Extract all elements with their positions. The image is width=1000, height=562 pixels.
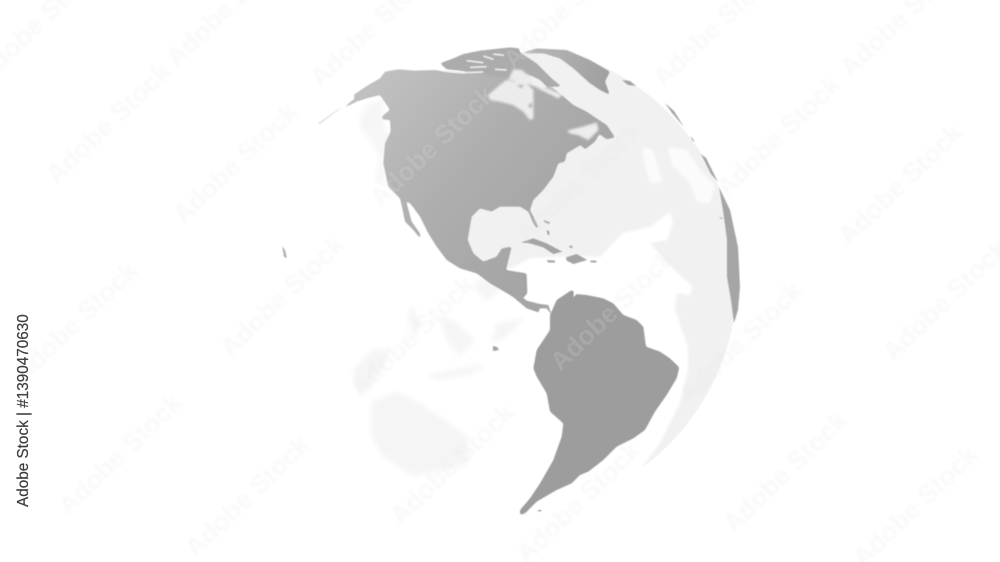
- South America: [520, 290, 679, 515]
- watermark white layer: Adobe Stock: [364, 79, 500, 213]
- far-side coast faint patches: [358, 98, 392, 187]
- watermark shadow layer: Adobe Stock: [179, 429, 315, 562]
- Central America isthmus: [493, 280, 552, 315]
- Arctic channels: [445, 54, 507, 73]
- watermark shadow layer: Adobe Stock: [717, 405, 853, 539]
- watermark shadow layer: Adobe Stock: [710, 69, 846, 203]
- islands in Hudson Bay: [517, 85, 532, 108]
- watermark white layer: Adobe Stock: [214, 229, 350, 363]
- watermark shadow layer: Adobe Stock: [832, 117, 968, 251]
- watermark white layer: Adobe Stock: [167, 96, 303, 230]
- dark landmasses: [282, 47, 740, 515]
- Arctic islands and Baffin: [440, 47, 562, 87]
- watermark white layer: Adobe Stock: [40, 56, 176, 190]
- far-side Australia: [372, 392, 468, 477]
- watermark shadow layer: Adobe Stock: [384, 397, 520, 531]
- Hudson Bay: [488, 78, 533, 120]
- watermark shadow layer: Adobe Stock: [672, 275, 808, 409]
- watermark white layer: Adobe Stock: [544, 243, 680, 377]
- light ocean region: [465, 52, 737, 470]
- watermark white layer: Adobe Stock: [7, 255, 143, 389]
- North America: [340, 47, 615, 302]
- watermark shadow layer: Adobe Stock: [52, 387, 188, 521]
- watermark shadow layer: Adobe Stock: [364, 79, 500, 213]
- white patches in ocean: [512, 212, 693, 470]
- Gulf of St Lawrence: [567, 123, 598, 140]
- Foxe Basin: [508, 69, 533, 85]
- watermark white layer: Adobe Stock: [510, 115, 646, 249]
- watermark shadow layer: Adobe Stock: [510, 115, 646, 249]
- Caribbean islands: [521, 220, 597, 264]
- watermark shadow layer: Adobe Stock: [167, 96, 303, 230]
- Greenland: [520, 48, 610, 95]
- Hudson Strait: [530, 83, 562, 98]
- watermark shadow layer: Adobe Stock: [7, 255, 143, 389]
- watermark white layer: Adobe Stock: [52, 387, 188, 521]
- watermark white layer: Adobe Stock: [832, 117, 968, 251]
- watermark white layer: Adobe Stock: [179, 429, 315, 562]
- watermark white layer: Adobe Stock: [344, 269, 480, 403]
- watermark shadow layer: Adobe Stock: [40, 56, 176, 190]
- watermark white layer: Adobe Stock: [672, 275, 808, 409]
- vertical stock credit: Adobe Stock | #1390470630: [15, 314, 32, 507]
- watermark white layer: Adobe Stock: [384, 397, 520, 531]
- watermark shadow layer: Adobe Stock: [544, 243, 680, 377]
- far-side continents seen through the globe: [353, 280, 525, 477]
- watermark white layer: Adobe Stock: [710, 69, 846, 203]
- watermark shadow layer: Adobe Stock: [214, 229, 350, 363]
- far-side New Guinea and Indonesia: [353, 280, 525, 393]
- small Pacific islets: [282, 108, 542, 512]
- watermark shadow layer: Adobe Stock: [344, 269, 480, 403]
- watermark white layer: Adobe Stock: [717, 405, 853, 539]
- eastern edge of globe: Europe and Africa limb: [622, 80, 740, 323]
